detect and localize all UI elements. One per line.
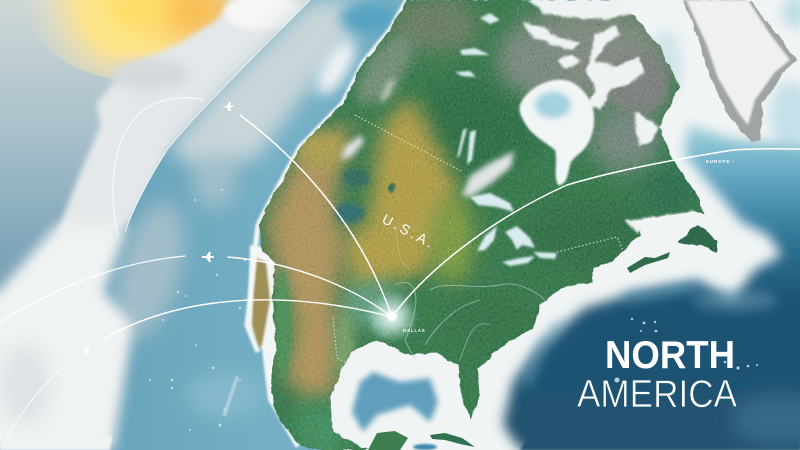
Yucatan (368, 431, 408, 450)
flight routes (0, 98, 800, 438)
cloud behind the globe (57, 0, 310, 240)
Nova Scotia (627, 252, 670, 273)
Atlantic Ocean (503, 125, 800, 450)
Atlantic islands (614, 318, 758, 382)
terrain relief texture (259, 0, 704, 450)
Greenland (683, 0, 797, 142)
label: Europe: EUROPE › (706, 159, 735, 164)
Newfoundland (677, 225, 717, 252)
Gulf of Mexico (352, 372, 438, 432)
terrain: north-west mountains (347, 0, 480, 113)
Caribbean sea patch (413, 444, 437, 450)
route glow at Dallas (366, 291, 418, 343)
Baja California (252, 258, 270, 349)
small clouds over land (341, 135, 514, 196)
borders and rivers (333, 115, 623, 362)
terrain: western uplands (265, 120, 396, 450)
Great Lakes and inland lakes (455, 13, 557, 266)
limb highlight (125, 0, 310, 232)
terrain: great plains ochre (340, 97, 474, 332)
terrain: arctic grey tundra (500, 3, 670, 172)
north america landmass (258, 0, 704, 450)
terrain: dark boreal and eastern forests (426, 79, 698, 286)
title (577, 334, 737, 416)
label: Dallas: DALLAS (403, 328, 425, 333)
Cuba (430, 433, 475, 447)
pale seas and coastal foam (248, 0, 800, 450)
label: U.S.A.: U.S.A. (380, 211, 439, 252)
coast foam outline (247, 0, 407, 352)
plane icons (84, 102, 234, 355)
ocean speckle (149, 189, 246, 431)
sun glow (25, 0, 245, 80)
arctic ice channels (524, 0, 693, 230)
lower cloud bank (0, 225, 133, 450)
title: AMERICA (577, 373, 737, 416)
Hudson Bay (519, 80, 594, 185)
title: NORTH (605, 334, 735, 377)
